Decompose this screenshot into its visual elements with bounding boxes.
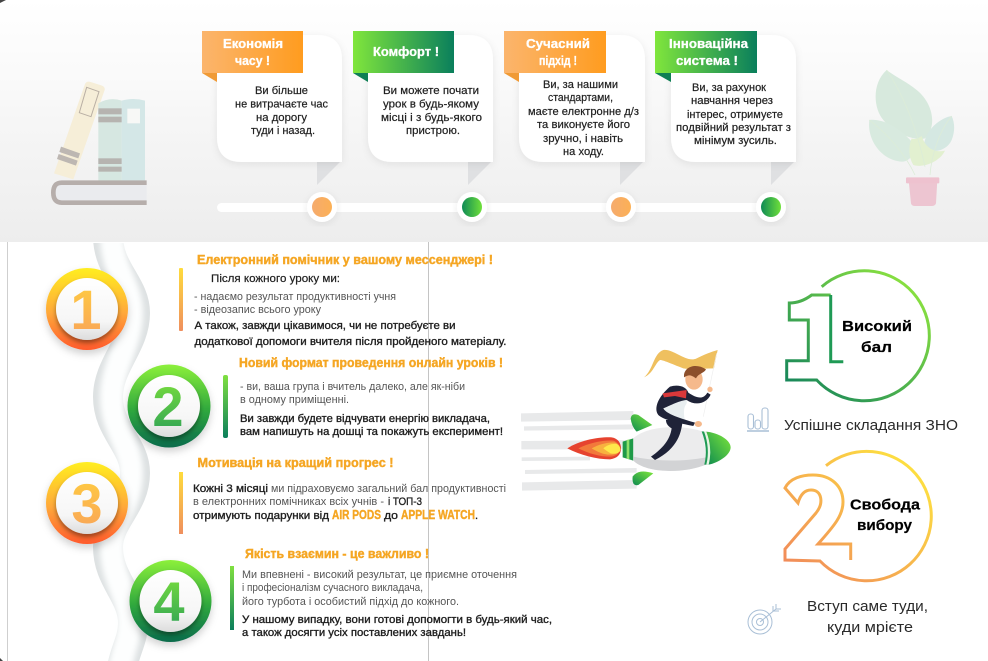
card: Сучасний підхід: підхід ! — [539, 53, 577, 68]
step badge 1: 1 — [70, 278, 102, 341]
card: Комфорт — [353, 31, 493, 185]
card: Комфорт: місці і з будь-якого — [381, 112, 482, 124]
step 3 text: . — [475, 510, 478, 522]
card: Сучасний підхід: на ходу. — [563, 146, 604, 158]
step 1 text — [179, 253, 506, 348]
benefit 1: high score — [787, 271, 929, 401]
step 3 text — [179, 456, 506, 534]
step 3 text: Мотивація на кращий прогрес ! — [198, 456, 394, 470]
step 2 text: в одному приміщенні. — [240, 394, 349, 406]
step 1 text: Електронний помічник у вашому мессенджері ! — [197, 253, 493, 267]
wavy ribbon — [108, 236, 135, 661]
card: Інноваційна система — [655, 31, 796, 185]
step badge 1 — [46, 268, 128, 350]
step 3 text: отримують подарунки від — [193, 510, 330, 522]
step 3 text: і ТОП-3 — [388, 496, 422, 508]
step 4 text: і професіоналізм сучасного викладача, — [242, 582, 423, 594]
card: Інноваційна система: Інноваційна — [669, 36, 749, 51]
step 1 text: Після кожного уроку ми: — [211, 273, 340, 285]
step 4 text — [230, 547, 552, 639]
timeline — [217, 192, 786, 222]
benefit 2: freedom of choice: Свобода — [850, 496, 921, 514]
step 2 text: Ви завжди будете відчувати енергію викладача, — [240, 413, 490, 425]
step 4 text: Ми впевнені - високий результат, це приємне оточення — [242, 569, 517, 581]
card: Економія часу: на дорогу — [256, 112, 307, 124]
timeline node 1 — [307, 192, 337, 222]
step badge 2 — [128, 364, 210, 448]
card: Сучасний підхід — [504, 31, 645, 185]
card: Сучасний підхід: зручно, і навіть — [543, 133, 623, 145]
card: Економія часу: не витрачаєте час — [235, 98, 328, 110]
card: Інноваційна система: навчання через — [691, 95, 773, 107]
caption: admission: куди мрієте — [827, 619, 913, 636]
step 3 text: AIR PODS — [332, 508, 381, 522]
card: Сучасний підхід: маєте електронне д/з — [528, 106, 639, 118]
benefit 1: high score: Високий — [842, 318, 912, 335]
card: Інноваційна система: мінімум зусиль. — [694, 135, 777, 147]
step badge 3 — [46, 462, 128, 544]
step 1 text: - надаємо результат продуктивності учня — [194, 291, 396, 303]
card: Економія часу — [202, 31, 342, 185]
step 4 text: Якість взаємин - це важливо ! — [245, 547, 429, 561]
caption: admission — [807, 598, 928, 636]
card: Економія часу: часу ! — [235, 53, 270, 68]
card: Сучасний підхід: Ви, за нашими — [543, 79, 618, 91]
icon: target — [748, 604, 781, 634]
illustration: books — [53, 82, 147, 203]
card: Економія часу: туди і назад. — [251, 125, 315, 137]
card: Сучасний підхід: стандартами, — [548, 92, 613, 104]
illustration: plant — [869, 70, 954, 206]
caption: ZNO: Успішне складання ЗНО — [784, 417, 958, 434]
step 3 text: APPLE WATCH — [401, 508, 475, 522]
timeline node 4 — [756, 192, 786, 222]
step badge 2: 2 — [152, 375, 184, 438]
step 4 text: його турбота і особистий підхід до кожного. — [242, 596, 459, 608]
benefit 2: freedom of choice: вибору — [857, 517, 913, 534]
card: Економія часу: Ви більше — [255, 85, 308, 97]
benefit 2: freedom of choice — [785, 451, 931, 581]
caption: admission: Вступ саме туди, — [807, 598, 928, 615]
card: Сучасний підхід: та виконуєте його — [537, 119, 630, 131]
step 1 text: додаткової допомоги вчителя після пройденого матеріалу. — [194, 336, 506, 348]
step 3 text: до — [384, 510, 398, 522]
card: Інноваційна система: інтерес, отримуєте — [687, 109, 783, 121]
timeline node 3 — [606, 192, 636, 222]
step 4 text: а також досягти усіх поставлених завдань! — [242, 627, 466, 639]
step 3 text: ми підраховуємо загальний бал продуктивності — [271, 483, 506, 495]
step badge 4 — [130, 560, 212, 642]
step 4 text: У нашому випадку, вони готові допомогти в будь-який час, — [242, 614, 552, 626]
step 1 text: А також, завжди цікавимося, чи не потребуєте ви — [194, 320, 456, 332]
card: Інноваційна система: Ви, за рахунок — [692, 82, 766, 94]
panel: top band — [0, 0, 988, 242]
benefit 1: high score: бал — [861, 339, 892, 356]
step 2 text: вам напишуть на дошці та покажуть експеримент! — [240, 426, 503, 438]
card: Комфорт: урок в будь-якому — [383, 98, 480, 110]
card: Економія часу: Економія — [223, 36, 283, 51]
timeline node 2 — [457, 192, 487, 222]
card: Комфорт: Ви можете почати — [383, 85, 479, 97]
step 2 text: - ви, ваша група і вчитель далеко, але як-ніби — [240, 381, 465, 393]
card: Комфорт: пристрою. — [406, 125, 460, 137]
step badge 3: 3 — [71, 472, 103, 535]
illustration: rocket with flag rider — [521, 350, 731, 491]
card: Комфорт: Комфорт ! — [373, 44, 439, 59]
step 2 text: Новий формат проведення онлайн уроків ! — [239, 356, 503, 370]
card: Сучасний підхід: Сучасний — [526, 36, 590, 51]
card: Інноваційна система: система ! — [676, 53, 738, 68]
icon: bar chart — [747, 408, 769, 431]
step 2 text — [223, 356, 503, 438]
step 3 text: Кожні 3 місяці — [193, 483, 268, 495]
card: Інноваційна система: подвійний результат з — [676, 122, 791, 134]
step 3 text: в електронних помічниках всіх учнів - — [193, 496, 384, 508]
step 1 text: - відеозапис всього уроку — [194, 304, 321, 316]
step badge 4: 4 — [153, 570, 185, 633]
